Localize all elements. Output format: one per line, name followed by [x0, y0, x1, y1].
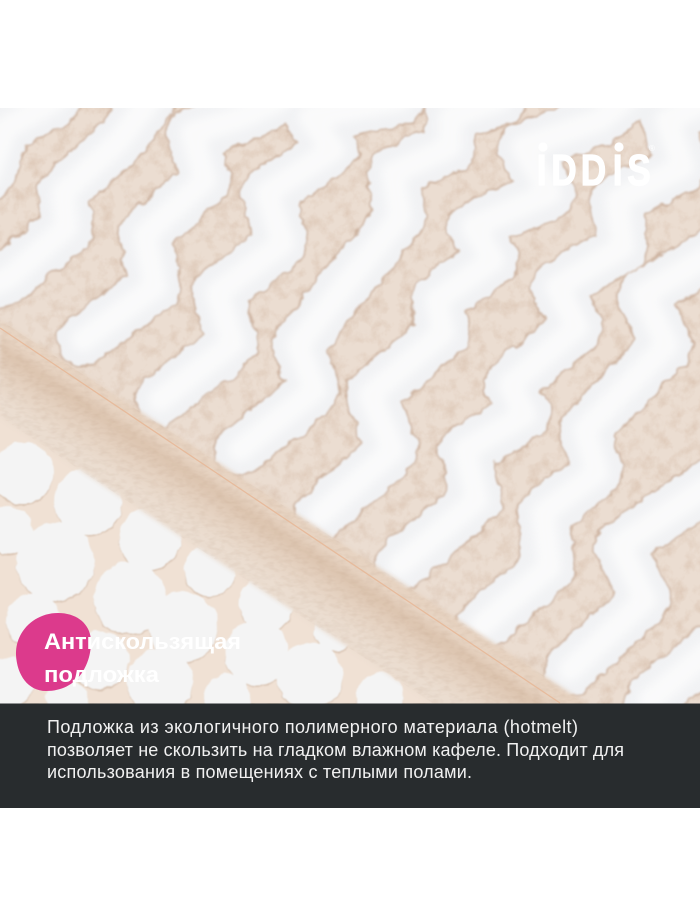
description text: Подложка из экологичного полимерного материала (hotmelt): [47, 717, 578, 737]
brand logo: IDDIS: [537, 146, 651, 195]
pink blob: [16, 613, 91, 691]
rug edge binding: [0, 320, 590, 706]
brand logo: ®: [649, 144, 655, 153]
zigzag chenille ribbons: [0, 100, 700, 700]
feature title: [44, 629, 241, 687]
round pile bubbles: [0, 442, 404, 722]
feature title: подложка: [44, 662, 160, 687]
description text: [47, 717, 624, 782]
edge stitch line: [0, 328, 560, 703]
description panel: [0, 704, 700, 808]
feature title: Антискользящая: [44, 629, 241, 654]
description text: использования в помещениях с теплыми полами.: [47, 762, 472, 782]
brand logo: [543, 142, 654, 186]
description text: позволяет не скользить на гладком влажном кафеле. Подходит для: [47, 740, 624, 760]
photo: bath mat texture: [0, 100, 700, 722]
lower mat field: [0, 418, 428, 703]
